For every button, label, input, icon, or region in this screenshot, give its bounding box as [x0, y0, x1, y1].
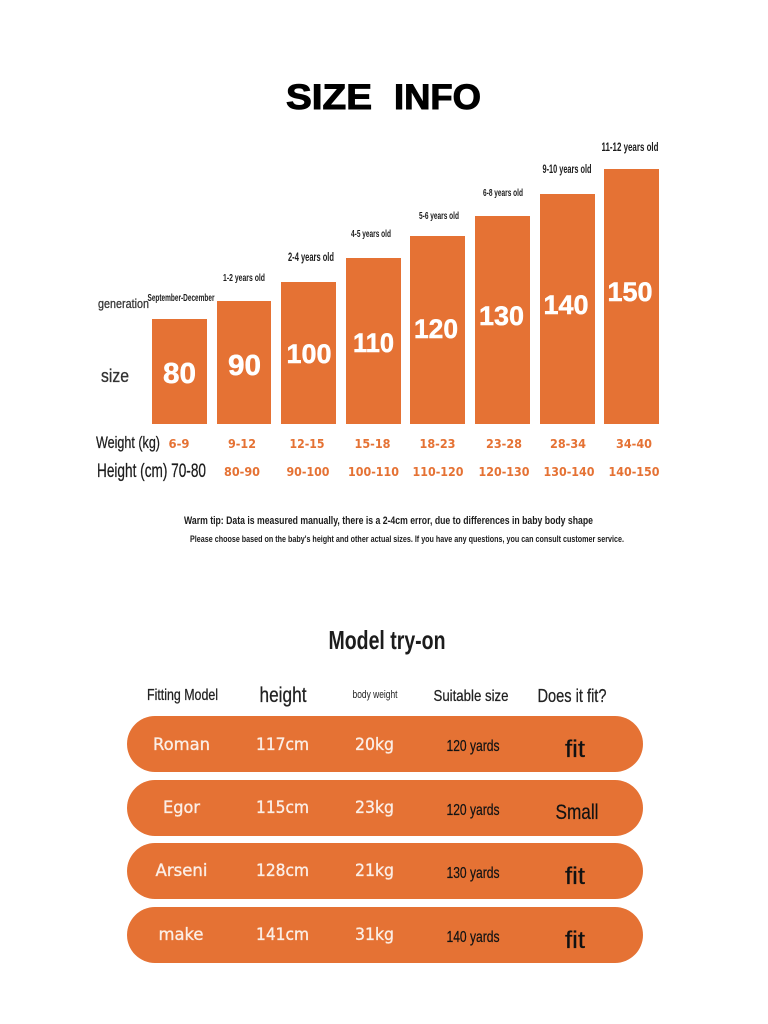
table header: Does it fit?	[538, 686, 606, 706]
row: Arseni: 128cm	[256, 861, 309, 881]
row: Egor: Egor	[163, 798, 200, 818]
row: make: fit	[565, 927, 585, 954]
row: Roman: 117cm	[256, 735, 309, 755]
row: Egor: 115cm	[256, 798, 309, 818]
warm tip: Warm tip: Data is measured manually, there is a 2-4cm error, due to differences in baby body shape	[184, 515, 593, 527]
weight values: 6-9	[168, 436, 190, 451]
row: Egor	[127, 780, 643, 836]
row: Roman: 120 yards	[446, 738, 500, 755]
height values: 120-130	[478, 464, 530, 479]
row: Arseni: Arseni	[156, 861, 208, 881]
row label: generation: generation	[98, 297, 149, 311]
table header: body weight	[352, 689, 398, 701]
weight values: 23-28	[486, 436, 522, 451]
height values: 90-100	[286, 464, 330, 479]
table header: height	[260, 684, 307, 707]
age labels: 1-2 years old	[223, 273, 265, 284]
age labels: 4-5 years old	[351, 229, 391, 240]
bar: size 80: 80	[163, 358, 196, 390]
bar: size 100	[281, 282, 336, 424]
weight values: 28-34	[550, 436, 586, 451]
table header	[147, 684, 606, 707]
age labels: 5-6 years old	[419, 211, 459, 222]
height values: 140-150	[608, 464, 660, 479]
weight values: 9-12	[228, 436, 256, 451]
bar: size 140: 140	[544, 290, 588, 320]
bar: size 150: 150	[608, 277, 652, 307]
customer service note: Please choose based on the baby's height and other actual sizes. If you have any questions, you can consult customer service.	[190, 534, 624, 545]
age labels: 9-10 years old	[542, 162, 592, 176]
age labels	[148, 140, 658, 304]
height values: 110-120	[412, 464, 464, 479]
row: Roman	[127, 716, 643, 772]
heading: model try-on: Model try-on	[328, 625, 446, 655]
bar: size 90	[217, 301, 271, 424]
bar: size 150	[604, 169, 659, 424]
bar: size 130	[475, 216, 530, 424]
bar: size 120: 120	[414, 314, 458, 344]
table header: Suitable size	[434, 688, 509, 705]
bar: size 100: 100	[286, 339, 332, 369]
title: INFO	[394, 78, 481, 117]
title: SIZE	[286, 78, 372, 117]
row: Roman: fit	[565, 736, 585, 763]
weight values: 18-23	[420, 436, 456, 451]
title	[286, 78, 481, 117]
row: Roman: Roman	[153, 735, 210, 755]
height values: 80-90	[224, 464, 260, 479]
height values: 130-140	[544, 464, 595, 479]
weight values: 15-18	[354, 436, 390, 451]
row: Roman: 20kg	[355, 735, 394, 755]
height values: 100-110	[348, 464, 399, 479]
row: make: make	[158, 925, 204, 945]
row: Arseni: fit	[565, 863, 585, 890]
bar chart: size by age	[152, 169, 659, 424]
bar: size 110: 110	[353, 328, 394, 358]
bar: size 90: 90	[228, 350, 261, 382]
weight values: 34-40	[616, 436, 652, 451]
age labels: September-December	[148, 293, 215, 304]
row: Egor: Small	[556, 801, 598, 824]
bar: size 80	[152, 319, 207, 424]
row: Egor: 120 yards	[446, 802, 500, 819]
bar: size 130: 130	[479, 301, 524, 331]
bar: size 140	[540, 194, 595, 424]
row: Arseni: 130 yards	[446, 865, 500, 882]
bar: size 120	[410, 236, 465, 424]
row label: height: Height (cm) 70-80	[97, 461, 206, 482]
row: make: 141cm	[256, 925, 309, 945]
age labels: 2-4 years old	[288, 250, 334, 264]
bar: size 110	[346, 258, 401, 424]
table header: Fitting Model	[147, 687, 218, 704]
row: make: 140 yards	[446, 929, 500, 946]
weight values: 12-15	[290, 436, 324, 451]
height values	[224, 464, 660, 479]
row: Arseni	[127, 843, 643, 899]
row: Arseni: 21kg	[355, 861, 394, 881]
weight values	[168, 436, 652, 451]
row label: size: size	[101, 366, 129, 386]
row label: weight: Weight (kg)	[96, 433, 160, 452]
row: Egor: 23kg	[355, 798, 394, 818]
age labels: 6-8 years old	[483, 188, 523, 199]
row: make: 31kg	[355, 925, 394, 945]
age labels: 11-12 years old	[602, 140, 658, 154]
row: make	[127, 907, 643, 963]
